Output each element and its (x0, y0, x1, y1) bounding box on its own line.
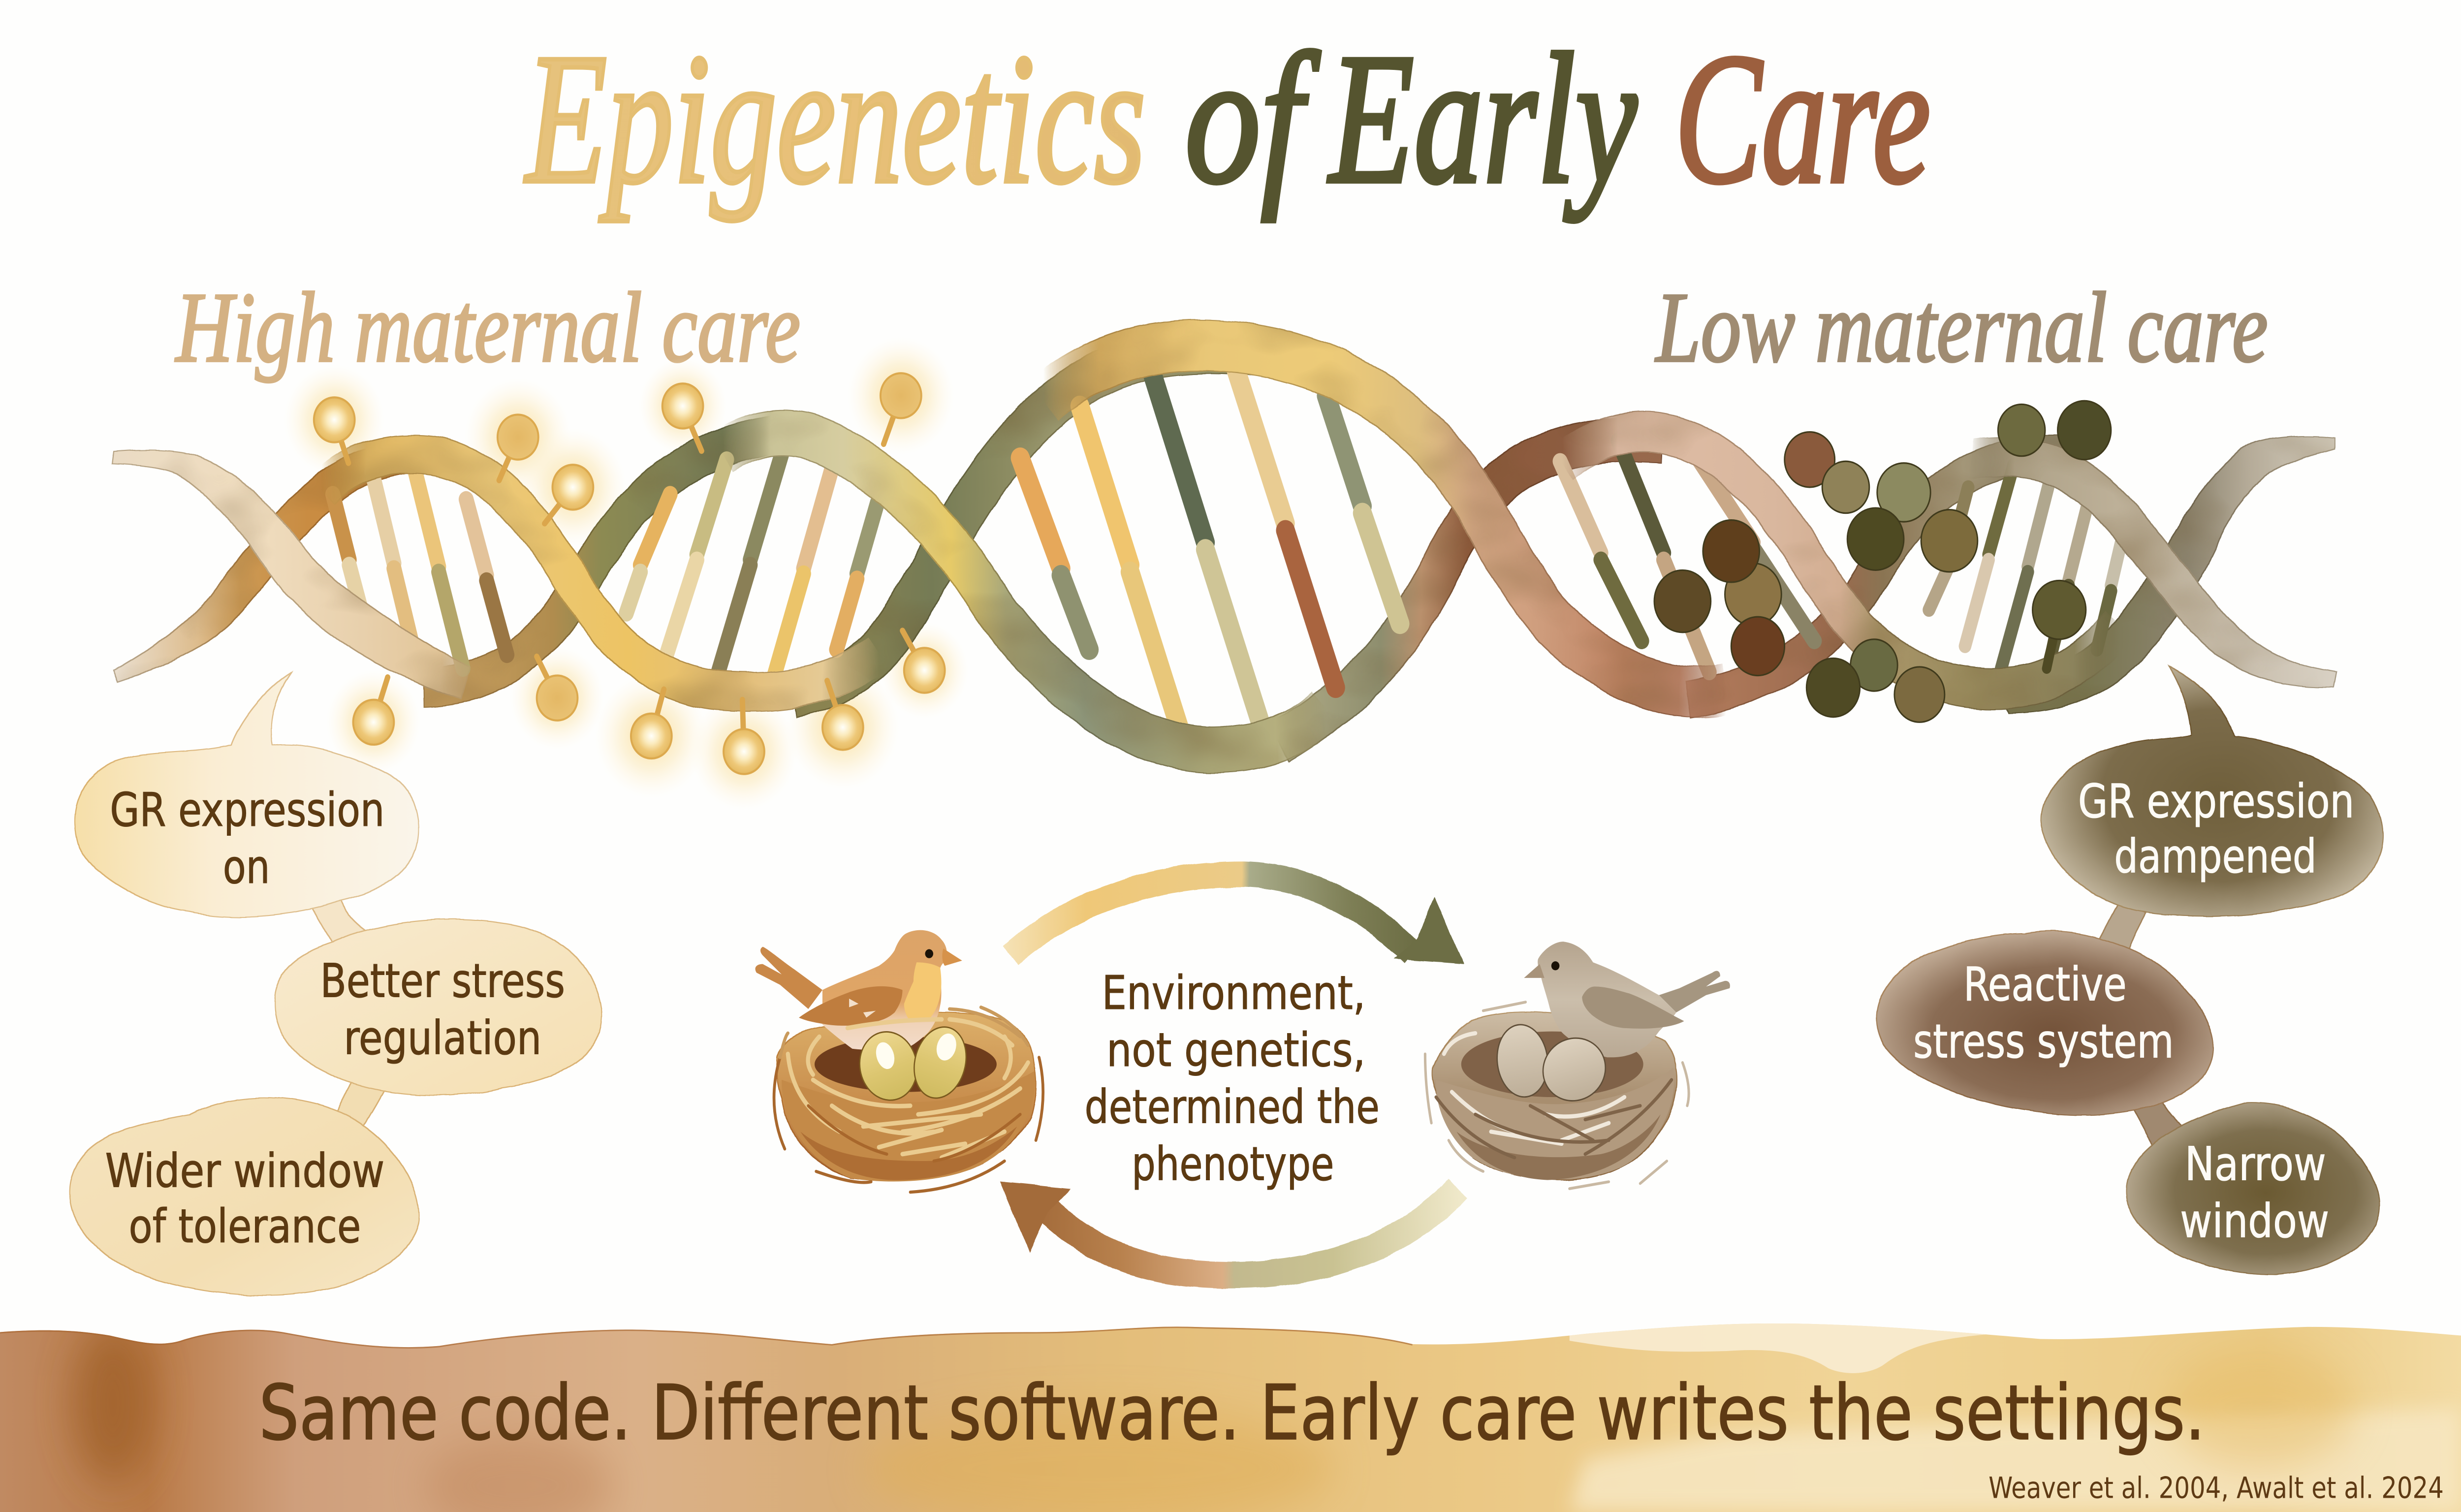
golden eggs (851, 1019, 974, 1109)
bubble: narrow window (2126, 1102, 2379, 1275)
title word: Epigenetics: Epigenetics (524, 16, 1146, 222)
centre statement: determined the (1084, 1080, 1380, 1134)
bubble: GR expression on (74, 670, 419, 917)
connector bubble one to two, dark (2097, 902, 2147, 954)
icon: nurturing nest with warm bird and golden eggs (755, 930, 1043, 1192)
muted bird (1524, 942, 1730, 1057)
centre statement: phenotype (1132, 1137, 1334, 1192)
centre statement: not genetics, (1106, 1023, 1365, 1077)
bubble: GR expression dampened (2040, 665, 2383, 916)
front strand 3 sage (722, 433, 1326, 750)
front strand 5 clay to olive (1562, 432, 2119, 689)
bubble: reactive stress system: Reactive (1963, 958, 2127, 1011)
pale eggs (1493, 1021, 1612, 1108)
bubble: better stress regulation (274, 919, 603, 1096)
title word: Early: Early (1327, 16, 1638, 222)
nest back (776, 1012, 1037, 1181)
title word: of: of (1185, 16, 1322, 222)
front strand 4 gold to clay (1044, 345, 1727, 692)
back strand 4 (1279, 440, 1664, 743)
front strand 2 gold (322, 454, 879, 692)
nest back, muted (1431, 1011, 1677, 1180)
arrow: low care to high care, bottom arc (1000, 1182, 1458, 1275)
bottom banner (0, 1313, 2461, 1512)
centre statement: Environment, (1102, 966, 1365, 1020)
banner wash (0, 1313, 2461, 1512)
banner statement: Same code. Different software. Early care writes the settings. (259, 1369, 2205, 1457)
connector bubble two to three (333, 1074, 386, 1127)
bubble: wider window of tolerance (69, 1097, 420, 1296)
methyl groups, high care: glowing gold tags (314, 373, 945, 774)
front ribbon strands (111, 345, 2337, 750)
bubble: better stress regulation: regulation (344, 1011, 541, 1065)
bubble: reactive stress system: stress system (1913, 1014, 2174, 1069)
connector bubble two to three, dark (2128, 1092, 2188, 1154)
bubble: narrow window: window (2180, 1194, 2329, 1248)
bubble: GR expression dampened: dampened (2114, 830, 2317, 884)
back strand 6 (1993, 436, 2335, 714)
callouts: high care chain (69, 670, 603, 1296)
heading: high maternal care: High maternal care (175, 273, 800, 383)
heading: low maternal care: Low maternal care (1655, 273, 2268, 383)
back strand 1 (113, 439, 411, 683)
bubble: wider window of tolerance: Wider window (105, 1144, 384, 1198)
bubble: wider window of tolerance: of tolerance (128, 1199, 361, 1254)
callouts: low care chain (1876, 665, 2383, 1275)
nest front weave (774, 1008, 1043, 1192)
methyl groups, low care: dark clusters (1654, 401, 2111, 722)
back ribbon strands (113, 350, 2335, 743)
nest cup, muted (1461, 1032, 1643, 1097)
back strand 3 (792, 350, 1256, 694)
warm bird (755, 930, 962, 1050)
methyl glows, high care side (284, 337, 968, 810)
icon: sparse nest with muted bird and pale eggs (1425, 942, 1730, 1189)
bubble: GR expression dampened: GR expression (2078, 774, 2354, 828)
DNA double helix (111, 337, 2337, 810)
back strand 5 (1687, 454, 2064, 700)
nest front weave, muted (1425, 1002, 1689, 1189)
bubble: GR expression on: on (223, 840, 270, 894)
bubble: better stress regulation: Better stress (320, 954, 565, 1008)
connector bubble one to two (311, 895, 371, 950)
bubble: narrow window: Narrow (2185, 1137, 2326, 1192)
bubble: GR expression on: GR expression (110, 783, 384, 837)
front strand 1 pale (111, 449, 471, 700)
nest cup (815, 1037, 997, 1092)
base pair rungs (333, 358, 2125, 731)
bubble: reactive stress system (1876, 931, 2213, 1115)
back strand 2 (424, 432, 800, 688)
citation: Weaver et al. 2004, Awalt et al. 2024 (1988, 1471, 2444, 1505)
centre statement (1084, 966, 1380, 1192)
title word: Care: Care (1674, 16, 1930, 222)
title (524, 16, 1930, 222)
front strand 6 grey tapered (1970, 437, 2337, 688)
arrow: high care to low care, top arc (1011, 874, 1464, 964)
